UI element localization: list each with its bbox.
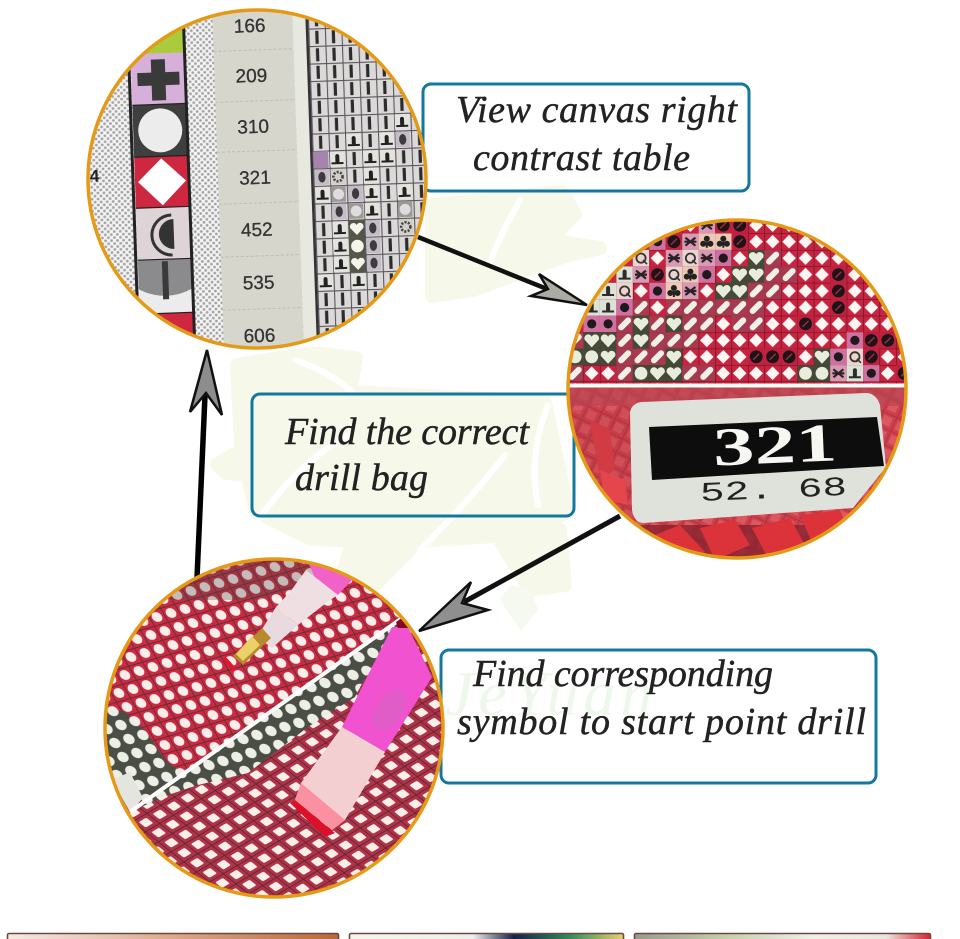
bag number: 321 — [712, 412, 838, 477]
text box: drill bag — [252, 394, 574, 516]
number column: 321 — [239, 168, 271, 190]
bottom product thumbnails — [8, 934, 930, 939]
caption line 2: contrast table — [473, 137, 690, 179]
bag label — [630, 393, 886, 523]
caption line 1: Find corresponding — [472, 653, 773, 695]
left margin digits: 4 — [89, 166, 100, 186]
lower canvas close-up — [130, 624, 442, 896]
divider line — [560, 384, 920, 388]
thumbnail 1 — [8, 934, 338, 939]
photo circle: pen picking up drill — [103, 557, 445, 899]
canvas close-up — [570, 222, 904, 384]
arrow: bag to pen — [419, 516, 620, 631]
caption line 2: drill bag — [295, 457, 428, 499]
small pen with gold tip — [224, 555, 352, 671]
symbol column — [128, 28, 196, 335]
caption line 1: View canvas right — [456, 89, 738, 131]
number column: 310 — [237, 117, 269, 139]
number column: 606 — [243, 325, 276, 348]
caption line 1: Find the correct — [284, 411, 530, 453]
text box: point drill — [441, 650, 876, 783]
watermark brand text: JeYuan — [445, 658, 658, 729]
diagonal divider line — [130, 618, 402, 812]
text box: view canvas — [423, 84, 749, 191]
large pink pen — [290, 627, 432, 837]
photo circle: colour chart — [86, 8, 428, 350]
background watermark: pale leaves and brand — [217, 192, 658, 729]
drill bag close-up — [570, 388, 904, 556]
number column: 452 — [241, 219, 273, 242]
number column: 166 — [233, 16, 266, 38]
thumbnail 3 — [634, 934, 930, 939]
symbol grid — [305, 19, 424, 336]
number column: 209 — [235, 66, 268, 88]
upper canvas close-up — [106, 560, 400, 813]
label black band — [649, 417, 884, 480]
caption line 2: symbol to start point drill — [457, 701, 866, 743]
number column — [212, 0, 319, 361]
bag code: 52. 68 — [700, 474, 848, 510]
thumbnail 2 — [350, 934, 624, 939]
number column: 535 — [242, 272, 275, 295]
photo circle: canvas and drill bag — [560, 210, 920, 570]
arrow: pen back to chart — [190, 350, 222, 578]
arrow: chart to canvas — [418, 237, 587, 305]
